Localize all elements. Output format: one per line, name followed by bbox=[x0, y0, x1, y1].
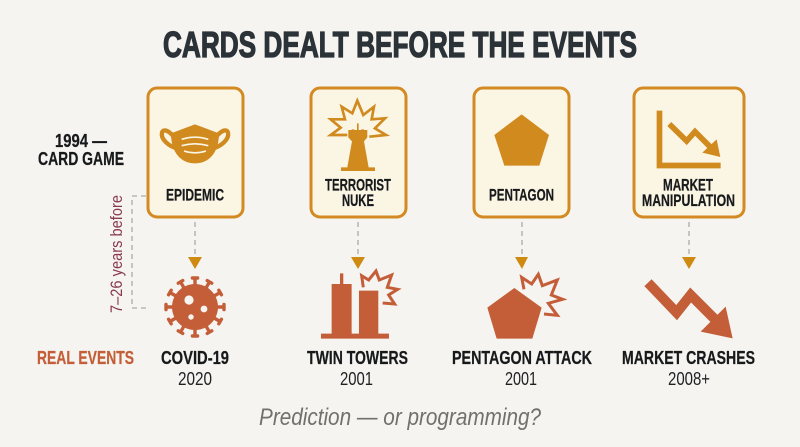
event: market crashes: 2008+ bbox=[668, 369, 710, 389]
event: pentagon attack: PENTAGON ATTACK bbox=[452, 347, 592, 368]
card label: epidemic: EPIDEMIC bbox=[166, 186, 224, 204]
event: pentagon attack: 2001 bbox=[505, 369, 537, 389]
card label: market manipulation: MANIPULATION bbox=[642, 192, 735, 210]
card: epidemic bbox=[148, 88, 243, 217]
row label: 1994 card game: CARD GAME bbox=[38, 149, 124, 169]
event: market crashes bbox=[622, 347, 755, 389]
event: pentagon attack bbox=[452, 347, 592, 389]
event: covid-19: 2020 bbox=[178, 369, 212, 389]
icon: pentagon attack bbox=[487, 274, 563, 339]
event: twin towers bbox=[307, 347, 408, 389]
row label: real events: REAL EVENTS bbox=[37, 347, 134, 368]
card: pentagon bbox=[474, 88, 569, 217]
icon: virus bbox=[166, 278, 224, 336]
arrow: pentagon to attack bbox=[515, 222, 528, 269]
card label: terrorist nuke: TERRORIST bbox=[325, 176, 391, 194]
icon: falling chart bbox=[657, 111, 721, 168]
card label: market manipulation: MARKET bbox=[663, 176, 713, 194]
card label: pentagon: PENTAGON bbox=[489, 186, 554, 204]
icon: face mask bbox=[162, 124, 228, 163]
card: terrorist nuke bbox=[311, 88, 406, 217]
row label: 1994 card game: 1994 — bbox=[55, 131, 107, 151]
timing label: 7–26 years before bbox=[107, 195, 126, 313]
card: market manipulation bbox=[634, 88, 744, 217]
card label: terrorist nuke bbox=[325, 176, 391, 210]
event: twin towers: TWIN TOWERS bbox=[307, 347, 408, 368]
icon: twin towers bbox=[321, 271, 398, 339]
card label: terrorist nuke: NUKE bbox=[342, 192, 374, 210]
row label: 1994 card game bbox=[38, 131, 124, 169]
event: covid-19 bbox=[161, 347, 229, 389]
arrow: nuke to towers bbox=[351, 222, 365, 269]
icon: pentagon bbox=[494, 114, 549, 166]
icon: tower with blast bbox=[331, 101, 386, 171]
event: covid-19: COVID-19 bbox=[161, 347, 229, 368]
event: twin towers: 2001 bbox=[340, 369, 373, 389]
event: market crashes: MARKET CRASHES bbox=[622, 347, 755, 368]
icon: market crash arrow bbox=[648, 283, 733, 338]
closing question: Prediction — or programming? bbox=[259, 404, 541, 431]
card label: market manipulation bbox=[642, 176, 735, 210]
arrow: epidemic to covid bbox=[188, 222, 202, 269]
arrow: market to crash bbox=[682, 222, 696, 269]
timing bracket bbox=[132, 196, 146, 308]
